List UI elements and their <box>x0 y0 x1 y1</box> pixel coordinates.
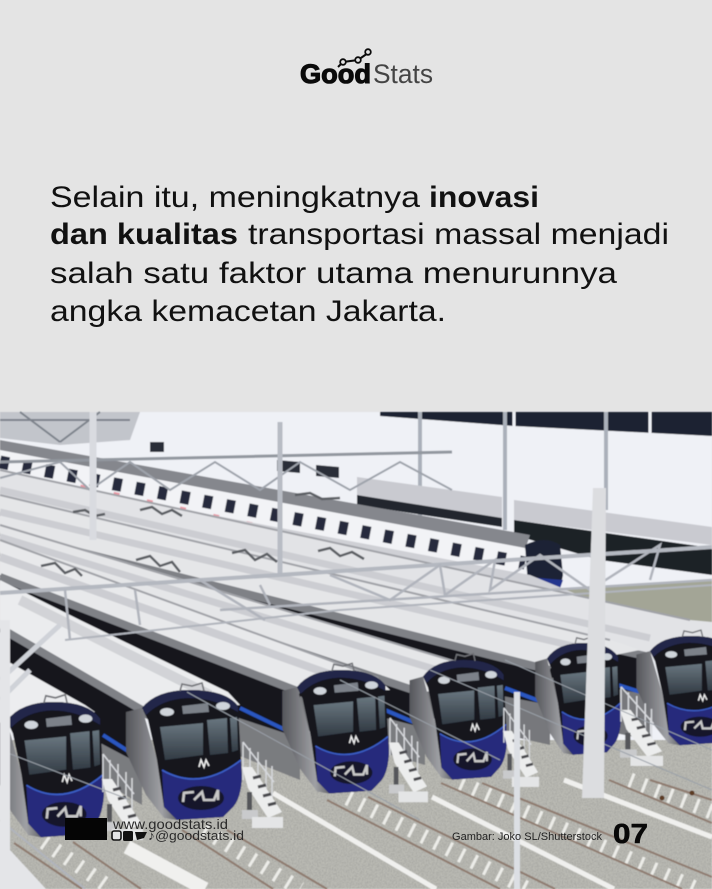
headline text <box>50 181 669 328</box>
footer: website: www.goodstats.id <box>112 816 228 832</box>
headline text: angka kemacetan Jakarta. <box>50 295 446 328</box>
footer: black box <box>65 818 107 840</box>
left pole and fence <box>0 620 46 889</box>
main white pole <box>582 488 606 798</box>
green ground behind trains <box>560 580 712 640</box>
train: white graffiti train <box>0 440 563 600</box>
train 4 <box>0 525 507 780</box>
pantographs on the roofs <box>41 493 364 576</box>
headline text: inovasi <box>429 181 539 214</box>
train 1 <box>0 657 104 837</box>
slim pole <box>514 692 520 889</box>
logo: GoodStats: Stats <box>373 59 433 89</box>
overhead gantries and poles <box>0 412 712 889</box>
footer: social icons and handle <box>112 828 244 843</box>
ballast and tracks <box>0 740 712 889</box>
logo: GoodStats <box>300 49 433 89</box>
headline text: transportasi massal menjadi <box>248 218 669 251</box>
header panel background <box>0 0 712 412</box>
train 3 <box>0 540 390 794</box>
headline text: dan kualitas <box>50 218 238 251</box>
depot building <box>0 412 712 889</box>
train 5 <box>0 495 640 755</box>
headline text: Selain itu, meningkatnya <box>50 181 420 214</box>
rows of roofs behind the trains <box>0 475 640 620</box>
boarding stairs <box>102 687 663 840</box>
footer: social icons and handle: ♪@goodstats.id <box>148 828 244 843</box>
train 2 <box>0 580 242 820</box>
logo: GoodStats: Good <box>300 59 371 89</box>
train 6 <box>0 470 712 745</box>
photo: MRT Jakarta trains in the depot <box>0 412 712 889</box>
page number: 07 <box>613 818 648 849</box>
headline text: salah satu faktor utama menurunnya <box>50 257 617 290</box>
photo credit: Gambar: Joko SL/Shutterstock <box>452 831 602 843</box>
